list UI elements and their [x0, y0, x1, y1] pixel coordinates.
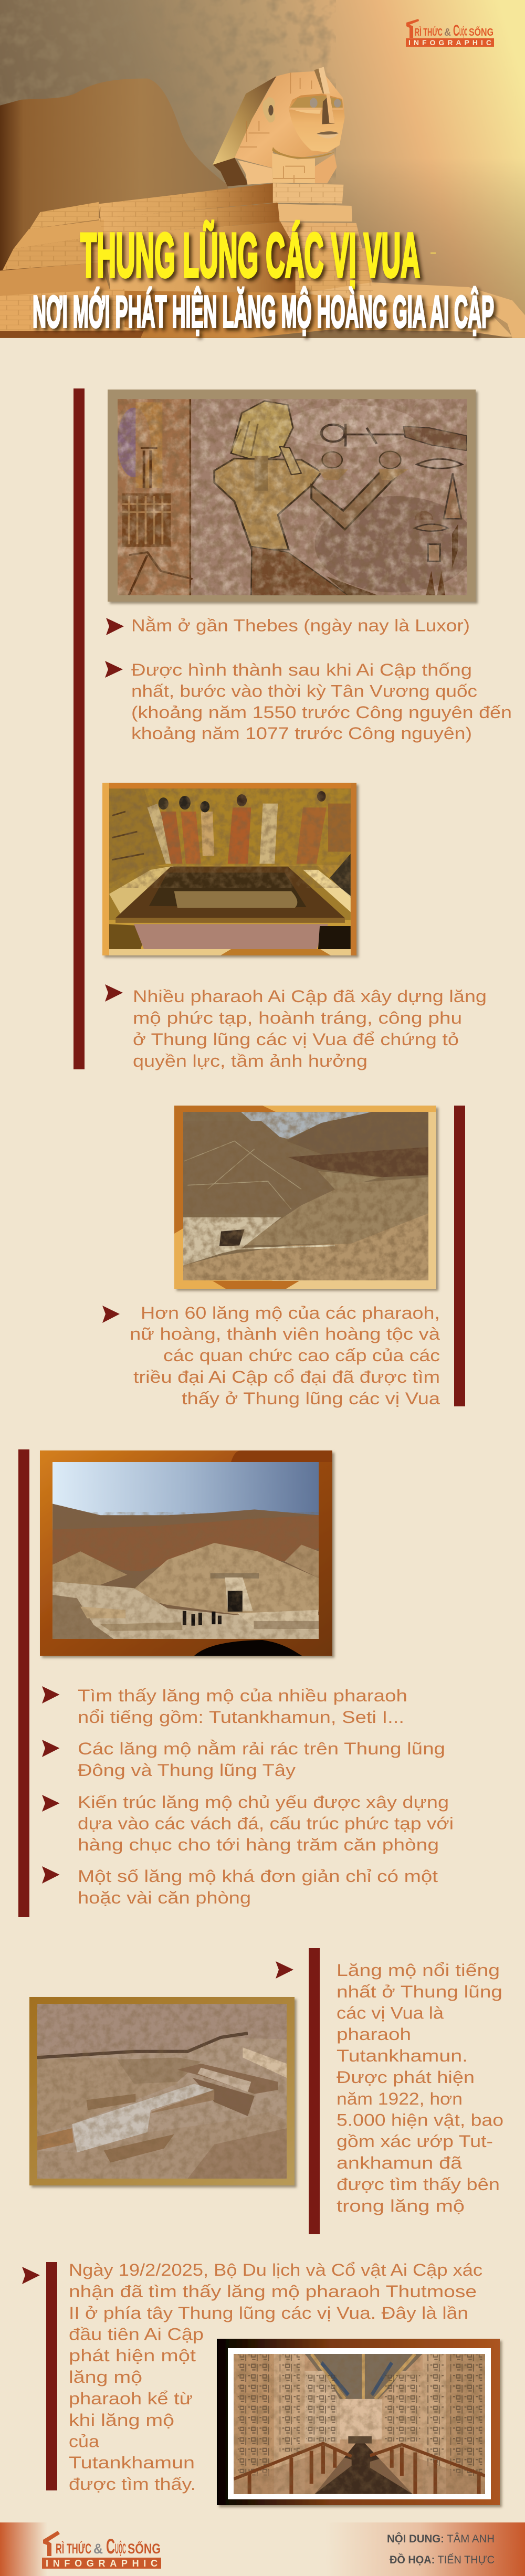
- text block: Thutmose II: lăng mộ: [69, 2368, 142, 2386]
- section 5: Thutmose II discovery: [22, 2260, 500, 2505]
- footer logo: UỘC: [115, 2540, 126, 2557]
- footer logo: [42, 2531, 161, 2569]
- bullet text 1: Nằm ở gần Thebes (ngày nay là Luxor): [131, 616, 470, 635]
- bullet text 2: nhất, bước vào thời kỳ Tân Vương quốc: [131, 681, 477, 700]
- text block: Tutankhamun: năm 1922, hơn: [337, 2089, 463, 2108]
- bullet text 2: (khoảng năm 1550 trước Công nguyên đến: [131, 703, 512, 722]
- bullet text 4: triều đại Ai Cập cổ đại đã được tìm: [133, 1368, 440, 1386]
- text block: Tutankhamun: pharaoh: [337, 2025, 411, 2044]
- text block: Tutankhamun: nhất ở Thung lũng: [337, 1982, 502, 2001]
- bullet text 3: quyền lực, tầm ảnh hưởng: [133, 1052, 368, 1070]
- bullet list: [42, 1686, 454, 1907]
- logo: Tri thức & Cuộc sống infographic: UỘC: [459, 26, 467, 38]
- vertical bar: [454, 1106, 465, 1406]
- bullet text 2: [105, 660, 512, 743]
- bullet: architecture: Kiến trúc lăng mộ chủ yếu được xây dựng: [78, 1793, 449, 1812]
- logo: Tri thức & Cuộc sống infographic: INFOGRAPHIC: [408, 38, 491, 47]
- credits: [387, 2532, 495, 2566]
- text block: Tutankhamun: ankhamun đã: [337, 2153, 462, 2172]
- bullet text 4: Hơn 60 lăng mộ của các pharaoh,: [141, 1303, 440, 1322]
- bullet: simple tombs: hoặc vài căn phòng: [78, 1888, 251, 1907]
- text block: Thutmose II: nhận đã tìm thấy lăng mộ pharaoh Thutmose: [69, 2282, 477, 2301]
- header background: [0, 0, 525, 338]
- photo: relief carving of pharaoh: [108, 390, 476, 602]
- footer logo: SỐNG: [128, 2540, 161, 2557]
- bullet arrow: [22, 2267, 40, 2284]
- sphinx body: [0, 183, 525, 338]
- text block: Thutmose II: Tutankhamun: [69, 2453, 195, 2472]
- section 1: location and tombs: [74, 388, 512, 1070]
- footer logo: &: [93, 2541, 103, 2557]
- logo: Tri thức & Cuộc sống infographic: [406, 19, 494, 47]
- text block: Thutmose II: pharaoh kể từ: [69, 2389, 193, 2408]
- footer: [0, 2522, 525, 2576]
- bullet text 3: mộ phức tạp, hoành tráng, công phu: [133, 1008, 462, 1027]
- footer logo: C: [106, 2535, 115, 2558]
- bullet text 3: [105, 984, 487, 1070]
- text block: Tutankhamun: trong lăng mộ: [337, 2196, 465, 2215]
- bullet: east and west valley: Các lăng mộ nằm rải rác trên Thung lũng: [78, 1739, 445, 1758]
- photo: terraced temple from above: [29, 1997, 295, 2185]
- bullet: east and west valley: [42, 1739, 445, 1780]
- photo: tomb entrance under blue sky: [40, 1450, 332, 1656]
- section 2: more than 60 tombs: [102, 1106, 465, 1408]
- bullet: east and west valley: Đông và Thung lũng Tây: [78, 1761, 296, 1780]
- logo: Tri thức & Cuộc sống infographic: SỐNG: [469, 26, 494, 38]
- small dash mark: [430, 253, 436, 254]
- text block: Thutmose II: khi lăng mộ: [69, 2411, 174, 2430]
- text block: Tutankhamun: Tutankhamun.: [337, 2046, 468, 2065]
- text block: Thutmose II: đầu tiên Ai Cập: [69, 2325, 204, 2343]
- vertical bar: [18, 1449, 29, 1917]
- bullet text 4: nữ hoàng, thành viên hoàng tộc và: [130, 1324, 440, 1343]
- photo: valley from above: [174, 1106, 436, 1289]
- bullet: simple tombs: Một số lăng mộ khá đơn giản chỉ có một: [78, 1867, 438, 1886]
- vertical bar: [46, 2262, 57, 2490]
- text block: Tutankhamun: Lăng mộ nổi tiếng: [337, 1961, 500, 1980]
- credits: ĐỒ HỌA: TIẾN THỰC: [390, 2553, 495, 2566]
- credits: NỘI DUNG: TÂM ANH: [387, 2532, 495, 2545]
- vertical bar: [309, 1948, 320, 2234]
- bullet text 3: ở Thung lũng các vị Vua để chứng tỏ: [133, 1030, 459, 1049]
- bullet: architecture: dựa vào các vách đá, cấu trúc phức tạp với: [78, 1814, 454, 1833]
- bullet: famous pharaohs: nổi tiếng gồm: Tutankhamun, Seti I...: [78, 1708, 404, 1727]
- text block: Tutankhamun: 5.000 hiện vật, bao: [337, 2110, 503, 2129]
- logo: Tri thức & Cuộc sống infographic: C: [453, 22, 459, 39]
- text block: Thutmose II: II ở phía tây Thung lũng các vị Vua. Đây là lần: [69, 2304, 468, 2322]
- text block: Thutmose II: được tìm thấy.: [69, 2475, 196, 2494]
- photo: golden sarcophagus chamber: [102, 783, 356, 955]
- text block: Tutankhamun: các vị Vua là: [337, 2003, 444, 2022]
- header banner: [0, 0, 525, 338]
- text block: Tutankhamun: được tìm thấy bên: [337, 2175, 500, 2194]
- text block: Tutankhamun: gồm xác ướp Tut-: [337, 2132, 493, 2151]
- section 4: Tutankhamun tomb: [29, 1948, 503, 2234]
- section 3: famous pharaohs and architecture: [18, 1449, 454, 1917]
- bullet: famous pharaohs: [42, 1686, 407, 1727]
- bullet: architecture: [42, 1793, 454, 1854]
- text block: Thutmose II: phát hiện một: [69, 2346, 196, 2365]
- bullet text 2: Được hình thành sau khi Ai Cập thống: [131, 660, 472, 679]
- photo: tomb corridor with stairs: [217, 2339, 500, 2505]
- text block: Thutmose II: của: [69, 2432, 99, 2451]
- text block: Thutmose II: Ngày 19/2/2025, Bộ Du lịch và Cổ vật Ai Cập xác: [69, 2260, 482, 2279]
- sphinx head: [213, 67, 345, 186]
- logo: Tri thức & Cuộc sống infographic: &: [444, 27, 451, 38]
- bullet text 2: khoảng năm 1077 trước Công nguyên): [131, 724, 472, 743]
- vertical bar: [74, 388, 85, 1069]
- footer logo: RÌ THỨC: [56, 2540, 91, 2557]
- bullet text 3: Nhiều pharaoh Ai Cập đã xây dựng lăng: [133, 987, 487, 1006]
- background hill: [0, 79, 234, 338]
- footer background: [0, 2522, 525, 2576]
- bullet: architecture: hàng chục cho tới hàng trăm căn phòng: [78, 1835, 439, 1854]
- text block: Tutankhamun: [337, 1961, 503, 2215]
- text block: Tutankhamun: Được phát hiện: [337, 2068, 475, 2087]
- bullet text 4: [102, 1303, 440, 1408]
- bullet text 4: các quan chức cao cấp của các: [163, 1346, 440, 1365]
- bullet text 4: thấy ở Thung lũng các vị Vua: [182, 1389, 440, 1408]
- bullet arrow: [276, 1961, 293, 1979]
- text block: Thutmose II: [69, 2260, 482, 2494]
- bullet: simple tombs: [42, 1866, 438, 1907]
- footer logo: INFOGRAPHIC: [46, 2558, 158, 2569]
- bullet: famous pharaohs: Tìm thấy lăng mộ của nhiều pharaoh: [78, 1686, 407, 1705]
- logo: Tri thức & Cuộc sống infographic: RÌ THỨC: [415, 26, 443, 38]
